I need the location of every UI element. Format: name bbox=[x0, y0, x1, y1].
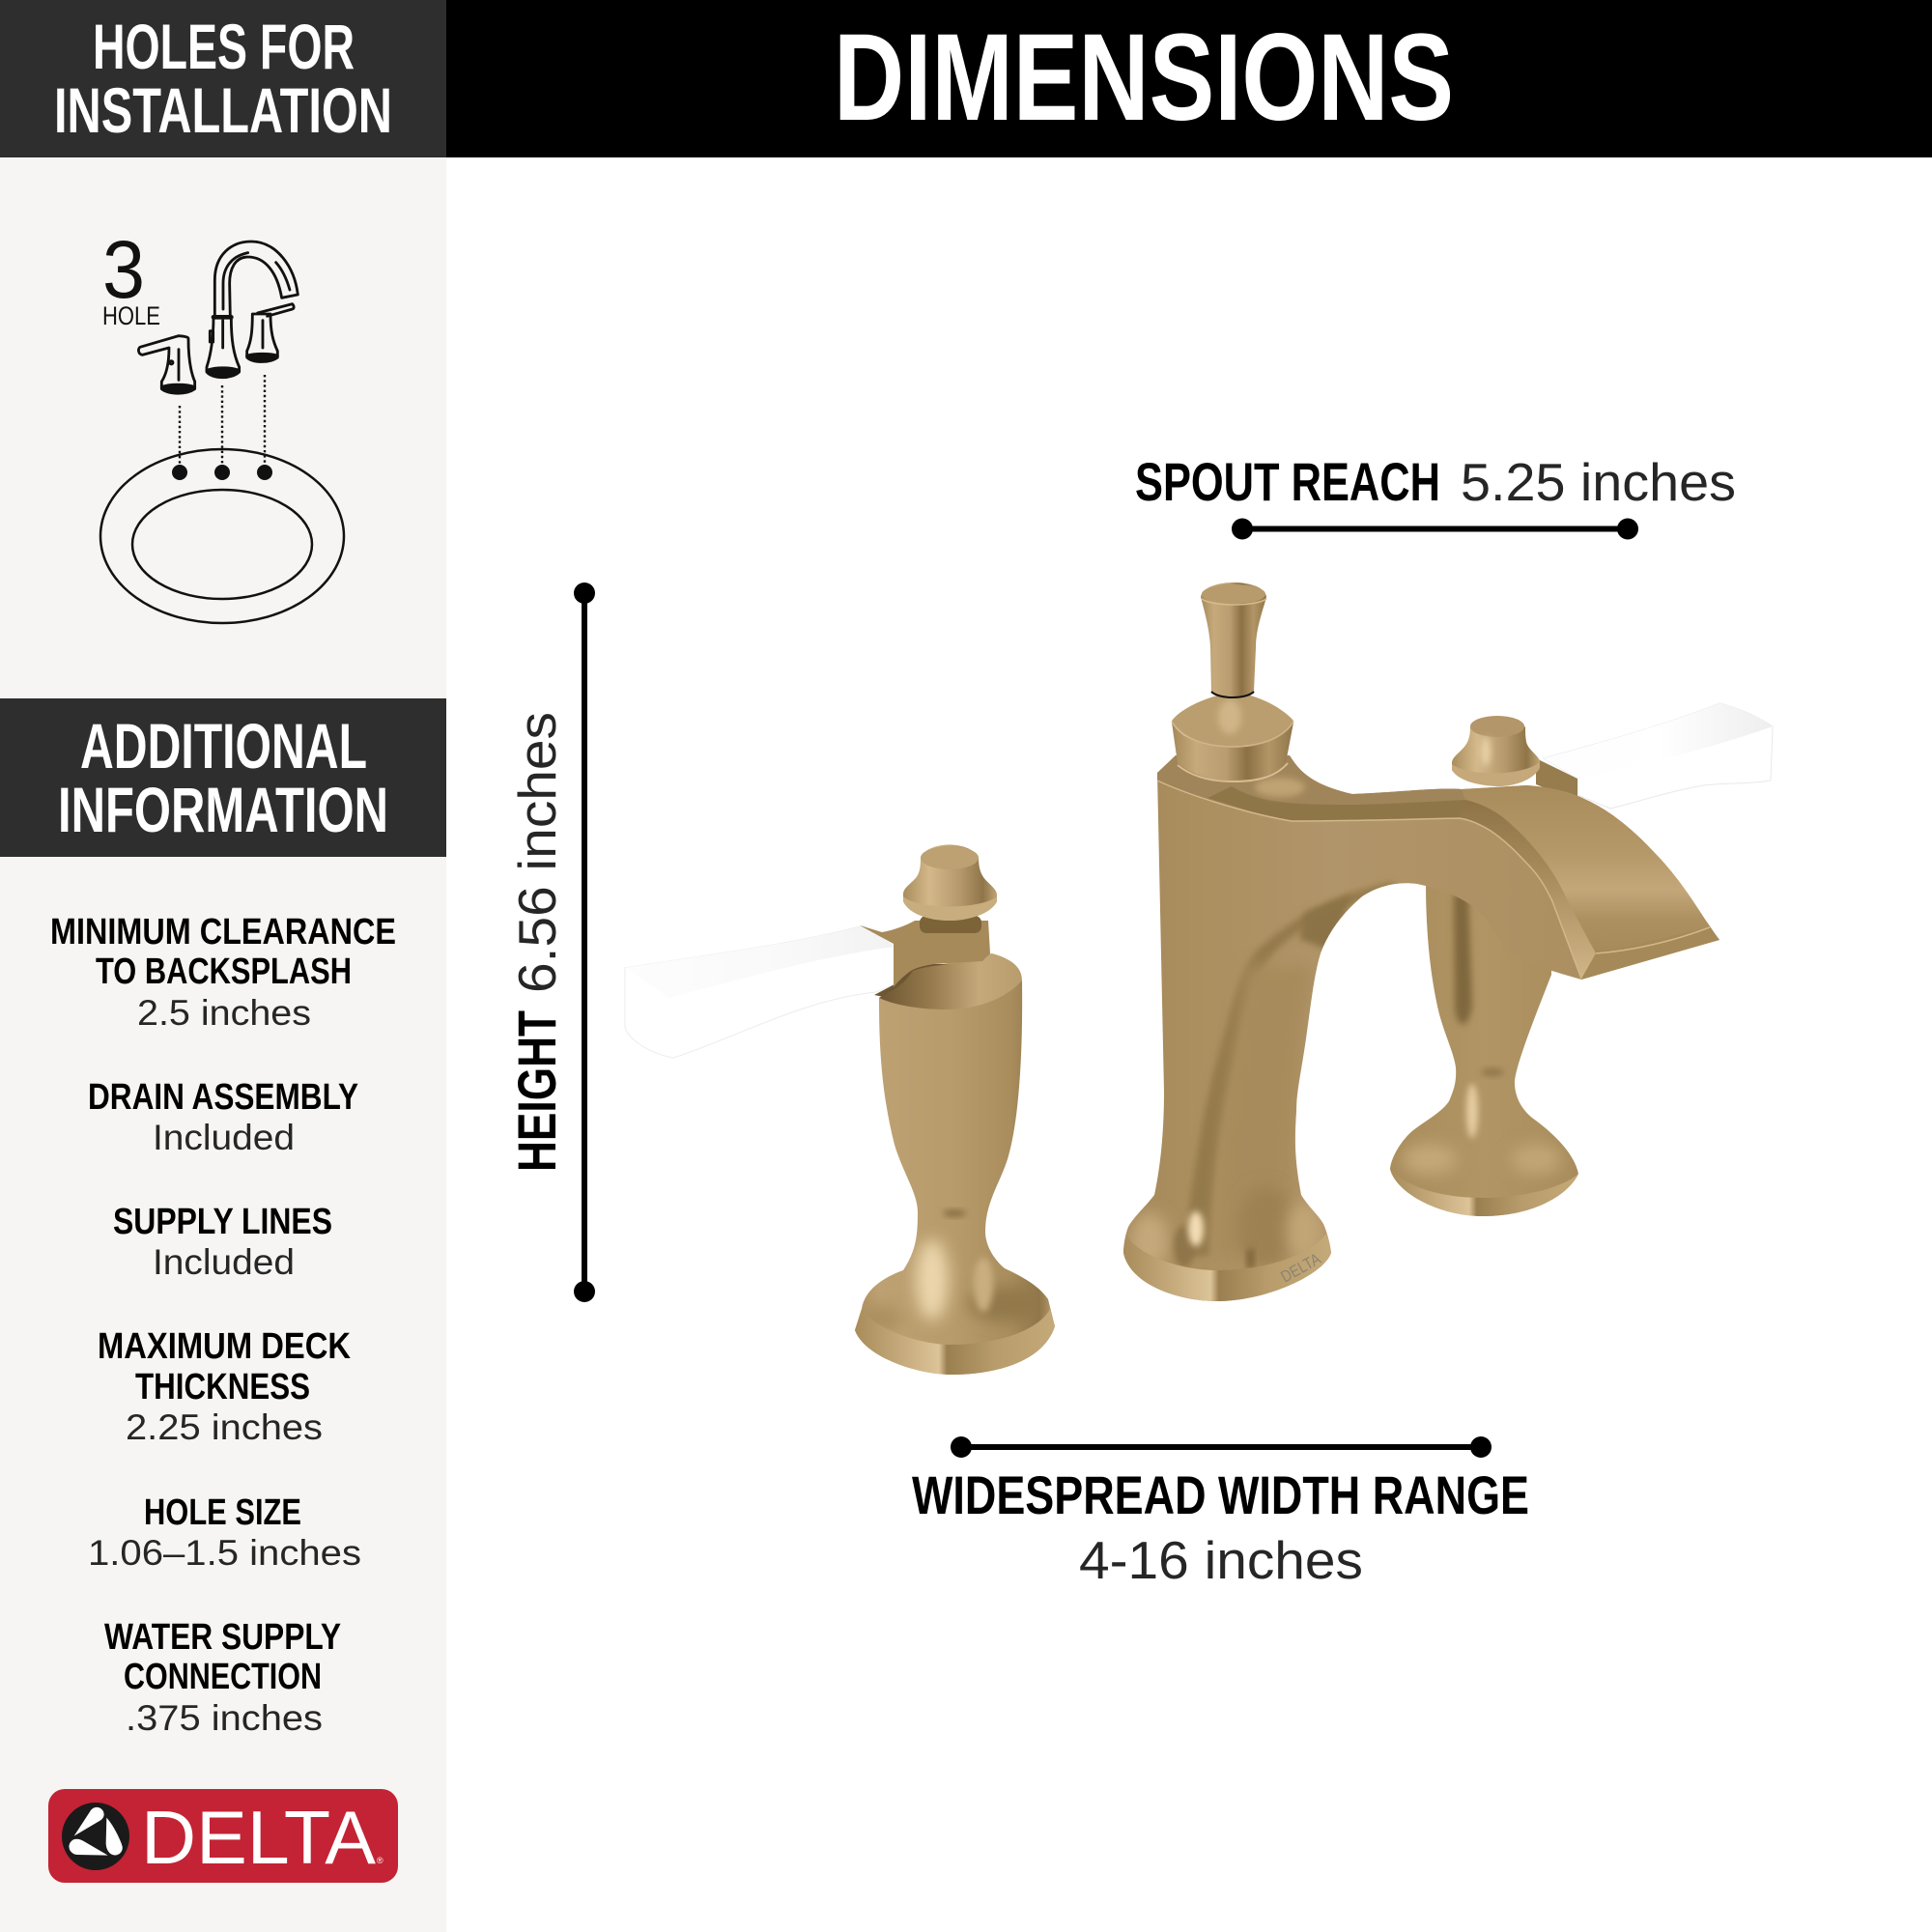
dimension: widespread width range: 4-16 inches bbox=[1079, 1530, 1363, 1590]
dimension: spout reach bbox=[1135, 451, 1736, 539]
left handle shading bbox=[856, 1209, 1041, 1332]
spec: hole size bbox=[88, 1492, 361, 1573]
spec: supply lines: SUPPLY LINES bbox=[113, 1202, 332, 1242]
pump collar bbox=[1172, 693, 1293, 781]
shadow under handle arm bbox=[874, 958, 989, 1000]
spec: maximum deck thickness: THICKNESS bbox=[135, 1367, 310, 1407]
dimension: height bbox=[506, 582, 595, 1302]
logo: delta bbox=[48, 1789, 398, 1883]
spec: water supply connection bbox=[104, 1617, 341, 1738]
product: center spout bbox=[1123, 582, 1719, 1301]
spec: minimum clearance to backsplash: TO BACKSPLASH bbox=[96, 952, 352, 992]
header: holes for installation bbox=[0, 0, 446, 157]
left handle base rim bbox=[855, 1309, 1055, 1375]
header: additional information: ADDITIONAL bbox=[80, 710, 367, 781]
spec: supply lines bbox=[113, 1202, 332, 1282]
dimension: widespread width range: WIDESPREAD WIDTH RANGE bbox=[912, 1464, 1529, 1525]
title: dimensions bbox=[446, 0, 1932, 157]
spec: drain assembly: Included bbox=[153, 1118, 295, 1157]
base rim bbox=[1123, 1234, 1331, 1301]
left handle collar bbox=[920, 916, 981, 933]
spec: water supply connection: CONNECTION bbox=[124, 1657, 322, 1697]
spec: minimum clearance to backsplash: 2.5 inches bbox=[137, 993, 311, 1033]
spec: minimum clearance to backsplash: MINIMUM CLEARANCE bbox=[50, 912, 396, 952]
spout shaded band bbox=[1208, 786, 1504, 831]
rear handle body bbox=[1390, 884, 1578, 1216]
spout body bbox=[1123, 755, 1719, 1301]
icon: 3 hole sink installation diagram bbox=[100, 224, 344, 623]
left handle top surface bbox=[879, 953, 1022, 1009]
header: additional information: INFORMATION bbox=[58, 774, 388, 845]
left handle knob bbox=[903, 844, 997, 921]
spec: water supply connection: .375 inches bbox=[126, 1698, 323, 1738]
spout tip bevel bbox=[1581, 927, 1719, 980]
left handle body bbox=[855, 953, 1055, 1375]
rear lever arm bbox=[1536, 758, 1577, 796]
left white lever bbox=[625, 925, 895, 1058]
dimension: height: HEIGHT bbox=[506, 1010, 567, 1172]
header: additional information bbox=[0, 698, 446, 857]
spout top surface bbox=[1157, 755, 1465, 821]
spec: drain assembly: DRAIN ASSEMBLY bbox=[88, 1077, 358, 1118]
spec: maximum deck thickness: 2.25 inches bbox=[126, 1407, 323, 1447]
spout shading bbox=[1130, 882, 1394, 1270]
rear white lever bbox=[1544, 703, 1773, 809]
dimension: spout reach: 5.25 inches bbox=[1461, 452, 1736, 512]
spec: maximum deck thickness: MAXIMUM DECK bbox=[98, 1326, 351, 1367]
dimension: height: 6.56 inches bbox=[507, 712, 567, 993]
spout side bevel bbox=[1459, 800, 1596, 979]
spec: drain assembly bbox=[88, 1077, 358, 1157]
dimension: widespread width range bbox=[912, 1436, 1529, 1590]
left handle arm bbox=[860, 921, 990, 987]
header: holes for installation: HOLES FOR bbox=[93, 11, 355, 82]
spec: supply lines: Included bbox=[153, 1242, 295, 1282]
spec: hole size: 1.06–1.5 inches bbox=[88, 1533, 361, 1573]
logo: delta: ® bbox=[377, 1856, 384, 1865]
product: rear handle with white lever bbox=[1390, 703, 1773, 1216]
title: dimensions: DIMENSIONS bbox=[834, 9, 1454, 147]
header: holes for installation: INSTALLATION bbox=[54, 74, 392, 146]
rear handle knob bbox=[1452, 716, 1540, 786]
dimension: spout reach: SPOUT REACH bbox=[1135, 451, 1440, 512]
text: logo stamped on base: DELTA bbox=[1278, 1249, 1324, 1286]
spec: hole size: HOLE SIZE bbox=[144, 1492, 301, 1533]
logo: delta: DELTA bbox=[141, 1795, 376, 1880]
pump rod bbox=[1201, 582, 1266, 697]
spout edge highlights bbox=[1157, 781, 1710, 979]
spec: maximum deck thickness bbox=[98, 1326, 351, 1447]
icon: 3 hole sink installation diagram: HOLE bbox=[102, 301, 160, 330]
product: left handle bbox=[625, 844, 1055, 1375]
spec: minimum clearance to backsplash bbox=[50, 912, 396, 1033]
icon: 3 hole sink installation diagram: 3 bbox=[102, 224, 145, 315]
spout front face bbox=[1462, 785, 1710, 953]
spec: water supply connection: WATER SUPPLY bbox=[104, 1617, 341, 1658]
panel: sidebar background bbox=[0, 0, 446, 1932]
